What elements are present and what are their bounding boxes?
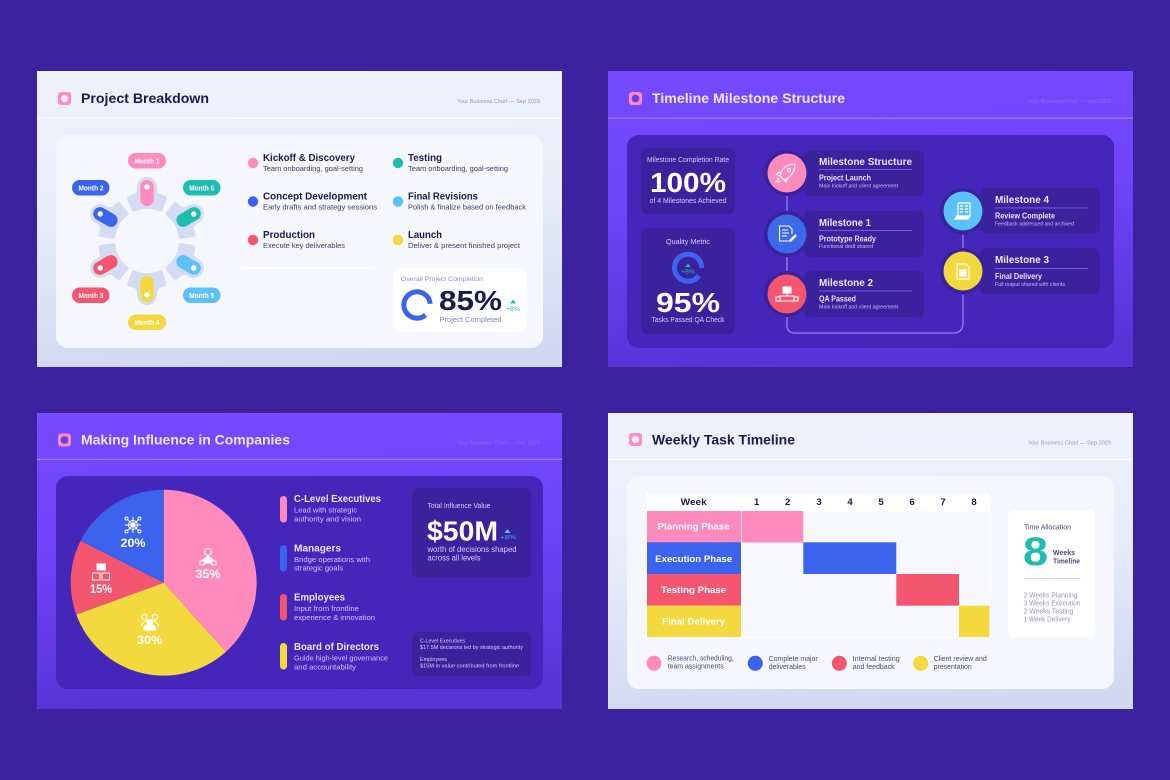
legend: project phases: Deliver & present finished project	[408, 241, 520, 250]
stat card: completion rate	[641, 148, 735, 214]
stat card: completion rate: Milestone Completion Rate	[647, 157, 729, 164]
legend: task phases: team assignments	[668, 664, 724, 671]
callout: total influence value	[412, 488, 531, 578]
callout: overall completion	[393, 268, 527, 332]
legend: project phases: Execute key deliverables	[263, 241, 345, 250]
milestone: structure	[764, 150, 924, 196]
milestone: 2	[764, 271, 924, 317]
callout: time allocation: Timeline	[1053, 557, 1080, 566]
callout: overall completion: Project Completed	[440, 315, 502, 324]
milestone: 3: Milestone 3	[995, 254, 1049, 266]
legend: project phases: Concept Development	[263, 190, 367, 202]
stat card: completion rate: of 4 Milestones Achieved	[650, 198, 727, 205]
chart: six month wheel: Month 1	[134, 158, 160, 165]
callout: value breakdown: $17.5M decisions led by strategic authority	[420, 645, 524, 651]
chart: gantt table: 5	[878, 497, 884, 508]
milestone: 2: Milestone 2	[819, 277, 873, 289]
callout: total influence value: +8%	[500, 535, 516, 541]
chart: six month wheel: Month 6	[189, 185, 214, 192]
chart: six month wheel: Month 2	[78, 185, 104, 192]
legend: task phases: Internal testing	[853, 656, 900, 663]
stat card: completion rate: 100%	[650, 167, 726, 198]
milestone: 4: Milestone 4	[995, 194, 1049, 206]
chart: influence pie: 20%	[120, 536, 146, 550]
legend: project phases: Production	[263, 229, 315, 241]
date caption: Your Business Chart — Sep 2029	[457, 99, 540, 105]
milestone: 2: Main kickoff and client agreement	[819, 304, 899, 310]
chart: gantt table: 6	[909, 497, 915, 508]
icon: rocket	[776, 164, 795, 182]
date caption: Your Business Chart — Sep 2029	[457, 440, 540, 446]
icon: executive	[200, 548, 216, 565]
chart: gantt table: Execution Phase	[655, 554, 732, 565]
milestone: 3	[940, 248, 1100, 294]
callout: overall completion: 85%	[439, 285, 502, 316]
legend: influence groups: strategic goals	[294, 564, 343, 573]
milestone: 4	[940, 188, 1100, 234]
heading: timeline milestone structure: Timeline Milestone Structure	[652, 90, 845, 106]
chart: gantt table: 3	[816, 497, 822, 508]
inner card	[627, 135, 1114, 348]
milestone: 1: Milestone 1	[819, 217, 871, 229]
callout: total influence value: $50M	[427, 516, 498, 547]
chart: gantt table	[646, 493, 990, 638]
date caption: Your Business Chart — Sep 2029	[1028, 99, 1111, 105]
stat card: quality metric: +8%	[681, 270, 696, 276]
chart: gantt table: 1	[754, 497, 760, 508]
stat card: quality metric: 95%	[656, 287, 720, 318]
heading: making influence: Making Influence in Companies	[81, 432, 290, 448]
icon: QA check	[776, 287, 798, 301]
legend: influence groups: Guide high-level governance	[294, 654, 388, 663]
icon: header badge	[58, 92, 71, 105]
legend: influence groups: and accountability	[294, 662, 356, 671]
legend: task phases: Client review and	[934, 656, 987, 663]
callout: overall completion: +8%	[506, 307, 521, 313]
legend: influence groups: Bridge operations with	[294, 555, 370, 564]
milestone: 3: Final Delivery	[995, 272, 1043, 281]
milestone: 1	[764, 211, 924, 257]
legend: influence groups	[280, 494, 388, 671]
callout: total influence value: across all levels	[428, 554, 480, 563]
milestone: 2: QA Passed	[819, 294, 856, 304]
milestone: 1: Prototype Ready	[819, 234, 877, 244]
legend: task phases: Research, scheduling,	[668, 656, 734, 663]
icon: document with pen	[780, 226, 796, 241]
callout: value breakdown	[412, 632, 531, 676]
callout: time allocation: Weeks	[1053, 548, 1075, 557]
legend: project phases: Team onboarding, goal-setting	[408, 164, 508, 173]
panel: timeline milestone structure	[608, 71, 1133, 367]
milestone: 4: Review Complete	[995, 212, 1056, 220]
icon: header badge	[629, 92, 642, 105]
callout: overall completion: Overall Project Completion	[401, 276, 483, 283]
legend: task phases: presentation	[934, 664, 972, 671]
date caption: Your Business Chart — Sep 2029	[1028, 440, 1111, 446]
heading: project breakdown: Project Breakdown	[81, 90, 209, 106]
milestone: 1: Functional draft shared	[819, 244, 873, 250]
chart: six month wheel: Month 4	[134, 320, 160, 327]
milestone: 3: Full output shared with clients	[995, 282, 1066, 288]
legend: task phases: deliverables	[769, 664, 806, 671]
chart: gantt table: 8	[971, 497, 977, 508]
callout: value breakdown: Employees	[420, 657, 448, 663]
icon: employees group	[141, 614, 159, 630]
chart: six month wheel: Month 5	[189, 293, 214, 300]
chart: gantt table: Testing Phase	[661, 585, 726, 596]
legend: influence groups: Managers	[294, 543, 341, 554]
heading: weekly task timeline: Weekly Task Timeline	[652, 432, 795, 448]
legend: influence groups: Input from frontline	[294, 604, 359, 613]
legend: influence groups: Board of Directors	[294, 642, 379, 653]
chart: six month wheel	[72, 153, 220, 330]
milestone: 4: Feedback addressed and archived	[995, 222, 1074, 228]
legend: project phases: Testing	[408, 152, 442, 164]
legend: influence groups: experience & innovation	[294, 613, 375, 622]
legend: influence groups: C-Level Executives	[294, 494, 381, 505]
legend: influence groups: Employees	[294, 592, 345, 604]
callout: value breakdown: $15M in value contributed from frontline	[420, 664, 519, 670]
chart: influence pie: 15%	[90, 582, 112, 596]
stat card: quality metric: Tasks Passed QA Check	[652, 317, 725, 324]
chart: six month wheel: Month 3	[78, 293, 104, 300]
stat card: quality metric	[641, 228, 735, 334]
chart: influence pie: 30%	[137, 633, 163, 647]
chart: influence pie: 35%	[196, 567, 221, 581]
chart: gantt table: 2	[785, 497, 790, 508]
connector lines	[787, 196, 963, 333]
chart: gantt table: 7	[940, 497, 946, 508]
panel: project breakdown	[37, 71, 562, 367]
milestone: structure: Project Launch	[819, 174, 871, 183]
panel: making influence in companies	[37, 413, 562, 709]
legend: project phases	[248, 152, 526, 250]
inner card	[627, 476, 1114, 689]
chart: gantt table: Final Delivery	[662, 616, 726, 628]
chart: influence pie	[71, 490, 257, 676]
legend: project phases: Launch	[408, 229, 442, 241]
callout: time allocation	[1008, 510, 1095, 638]
icon: review scroll	[955, 203, 970, 219]
milestone: structure: Main kickoff and client agreement	[819, 184, 899, 190]
icon: header badge	[58, 434, 71, 446]
callout: time allocation: Time Allocation	[1024, 524, 1071, 531]
stat card: quality metric: Quality Metric	[666, 239, 711, 246]
legend: project phases: Kickoff & Discovery	[263, 152, 355, 164]
chart: gantt table: Planning Phase	[658, 522, 730, 532]
callout: time allocation: 2 Weeks Planning	[1024, 593, 1078, 600]
callout: value breakdown: C-Level Executives	[420, 639, 466, 645]
legend: influence groups: Lead with strategic	[294, 506, 357, 515]
legend: task phases: and feedback	[853, 664, 895, 671]
icon: org boxes	[92, 564, 110, 580]
inner card	[56, 135, 543, 348]
panel: weekly task timeline	[608, 413, 1133, 709]
legend: task phases: Complete major	[769, 656, 818, 663]
chart: gantt table: Week	[681, 497, 707, 508]
callout: time allocation: 8	[1023, 530, 1048, 574]
legend: project phases: Early drafts and strategy sessions	[263, 202, 377, 212]
callout: total influence value: Total Influence Value	[428, 503, 491, 510]
callout: time allocation: 3 Weeks Execution	[1024, 601, 1081, 608]
callout: time allocation: 1 Week Delivery	[1024, 617, 1071, 624]
chart: gantt table: 4	[847, 497, 853, 508]
legend: project phases: Team onboarding, goal-setting	[263, 164, 363, 173]
icon: header badge	[629, 433, 642, 446]
callout: time allocation: 2 Weeks Testing	[1024, 609, 1074, 616]
legend: project phases: Final Revisions	[408, 190, 478, 202]
callout: total influence value: worth of decisions shaped	[427, 545, 516, 554]
legend: project phases: Polish & finalize based on feedback	[408, 202, 526, 212]
icon: delivery file	[957, 264, 969, 279]
legend: task phases	[646, 656, 987, 671]
inner card	[56, 476, 543, 689]
icon: network hub	[125, 517, 141, 533]
milestone: structure: Milestone Structure	[819, 156, 912, 168]
legend: influence groups: authority and vision	[294, 514, 361, 523]
